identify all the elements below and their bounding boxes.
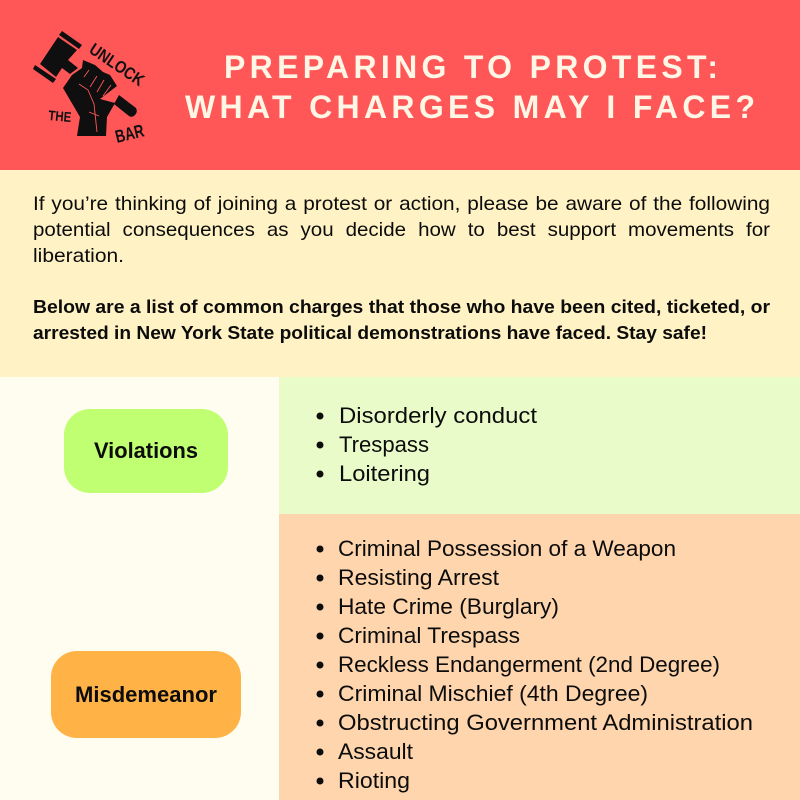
logo text: the: THE — [48, 107, 72, 125]
header band — [0, 0, 800, 170]
panel: misdemeanor list — [279, 514, 800, 800]
icon: raised fist — [63, 60, 117, 136]
panel: violations list: Loitering — [339, 461, 430, 486]
intro paragraph — [33, 193, 771, 267]
icon: gavel — [33, 31, 137, 117]
panel: violations list: Trespass — [339, 432, 429, 457]
logo text: unlock: UNLOCK — [86, 40, 148, 90]
intro panel — [0, 170, 800, 377]
bold paragraph — [33, 296, 770, 343]
badge: misdemeanor: Misdemeanor — [75, 682, 217, 707]
panel: misdemeanor list: Rioting — [338, 768, 410, 793]
badge: violations — [64, 409, 228, 493]
panel: misdemeanor list: Obstructing Government Administration — [338, 710, 753, 735]
panel: misdemeanor list: Criminal Trespass — [338, 623, 520, 648]
bold paragraph: arrested in New York State political demonstrations have faced. Stay safe! — [33, 322, 707, 343]
intro paragraph: liberation. — [33, 245, 124, 267]
logo text: bar: BAR — [113, 120, 146, 147]
badge: misdemeanor — [51, 651, 241, 738]
panel: misdemeanor list: Hate Crime (Burglary) — [338, 594, 559, 619]
title — [185, 49, 755, 125]
bold paragraph: Below are a list of common charges that those who have been cited, ticketed, or — [33, 296, 770, 317]
intro paragraph: potential consequences as you decide how to best support movements for — [33, 219, 771, 241]
panel: misdemeanor list: Assault — [338, 739, 413, 764]
panel: misdemeanor list: Criminal Mischief (4th Degree) — [338, 681, 648, 706]
panel: violations list: Disorderly conduct — [339, 403, 537, 428]
title: WHAT CHARGES MAY I FACE? — [185, 89, 755, 125]
panel: misdemeanor list: Criminal Possession of a Weapon — [338, 536, 676, 561]
panel: violations list — [279, 377, 800, 514]
panel: misdemeanor list: Reckless Endangerment (2nd Degree) — [338, 652, 720, 677]
intro paragraph: If you’re thinking of joining a protest or action, please be aware of the following — [33, 193, 770, 215]
left column — [0, 377, 279, 800]
logo: fist and gavel — [33, 31, 148, 147]
panel: misdemeanor list: Resisting Arrest — [338, 565, 499, 590]
title: PREPARING TO PROTEST: — [224, 49, 718, 85]
badge: violations: Violations — [94, 438, 198, 463]
